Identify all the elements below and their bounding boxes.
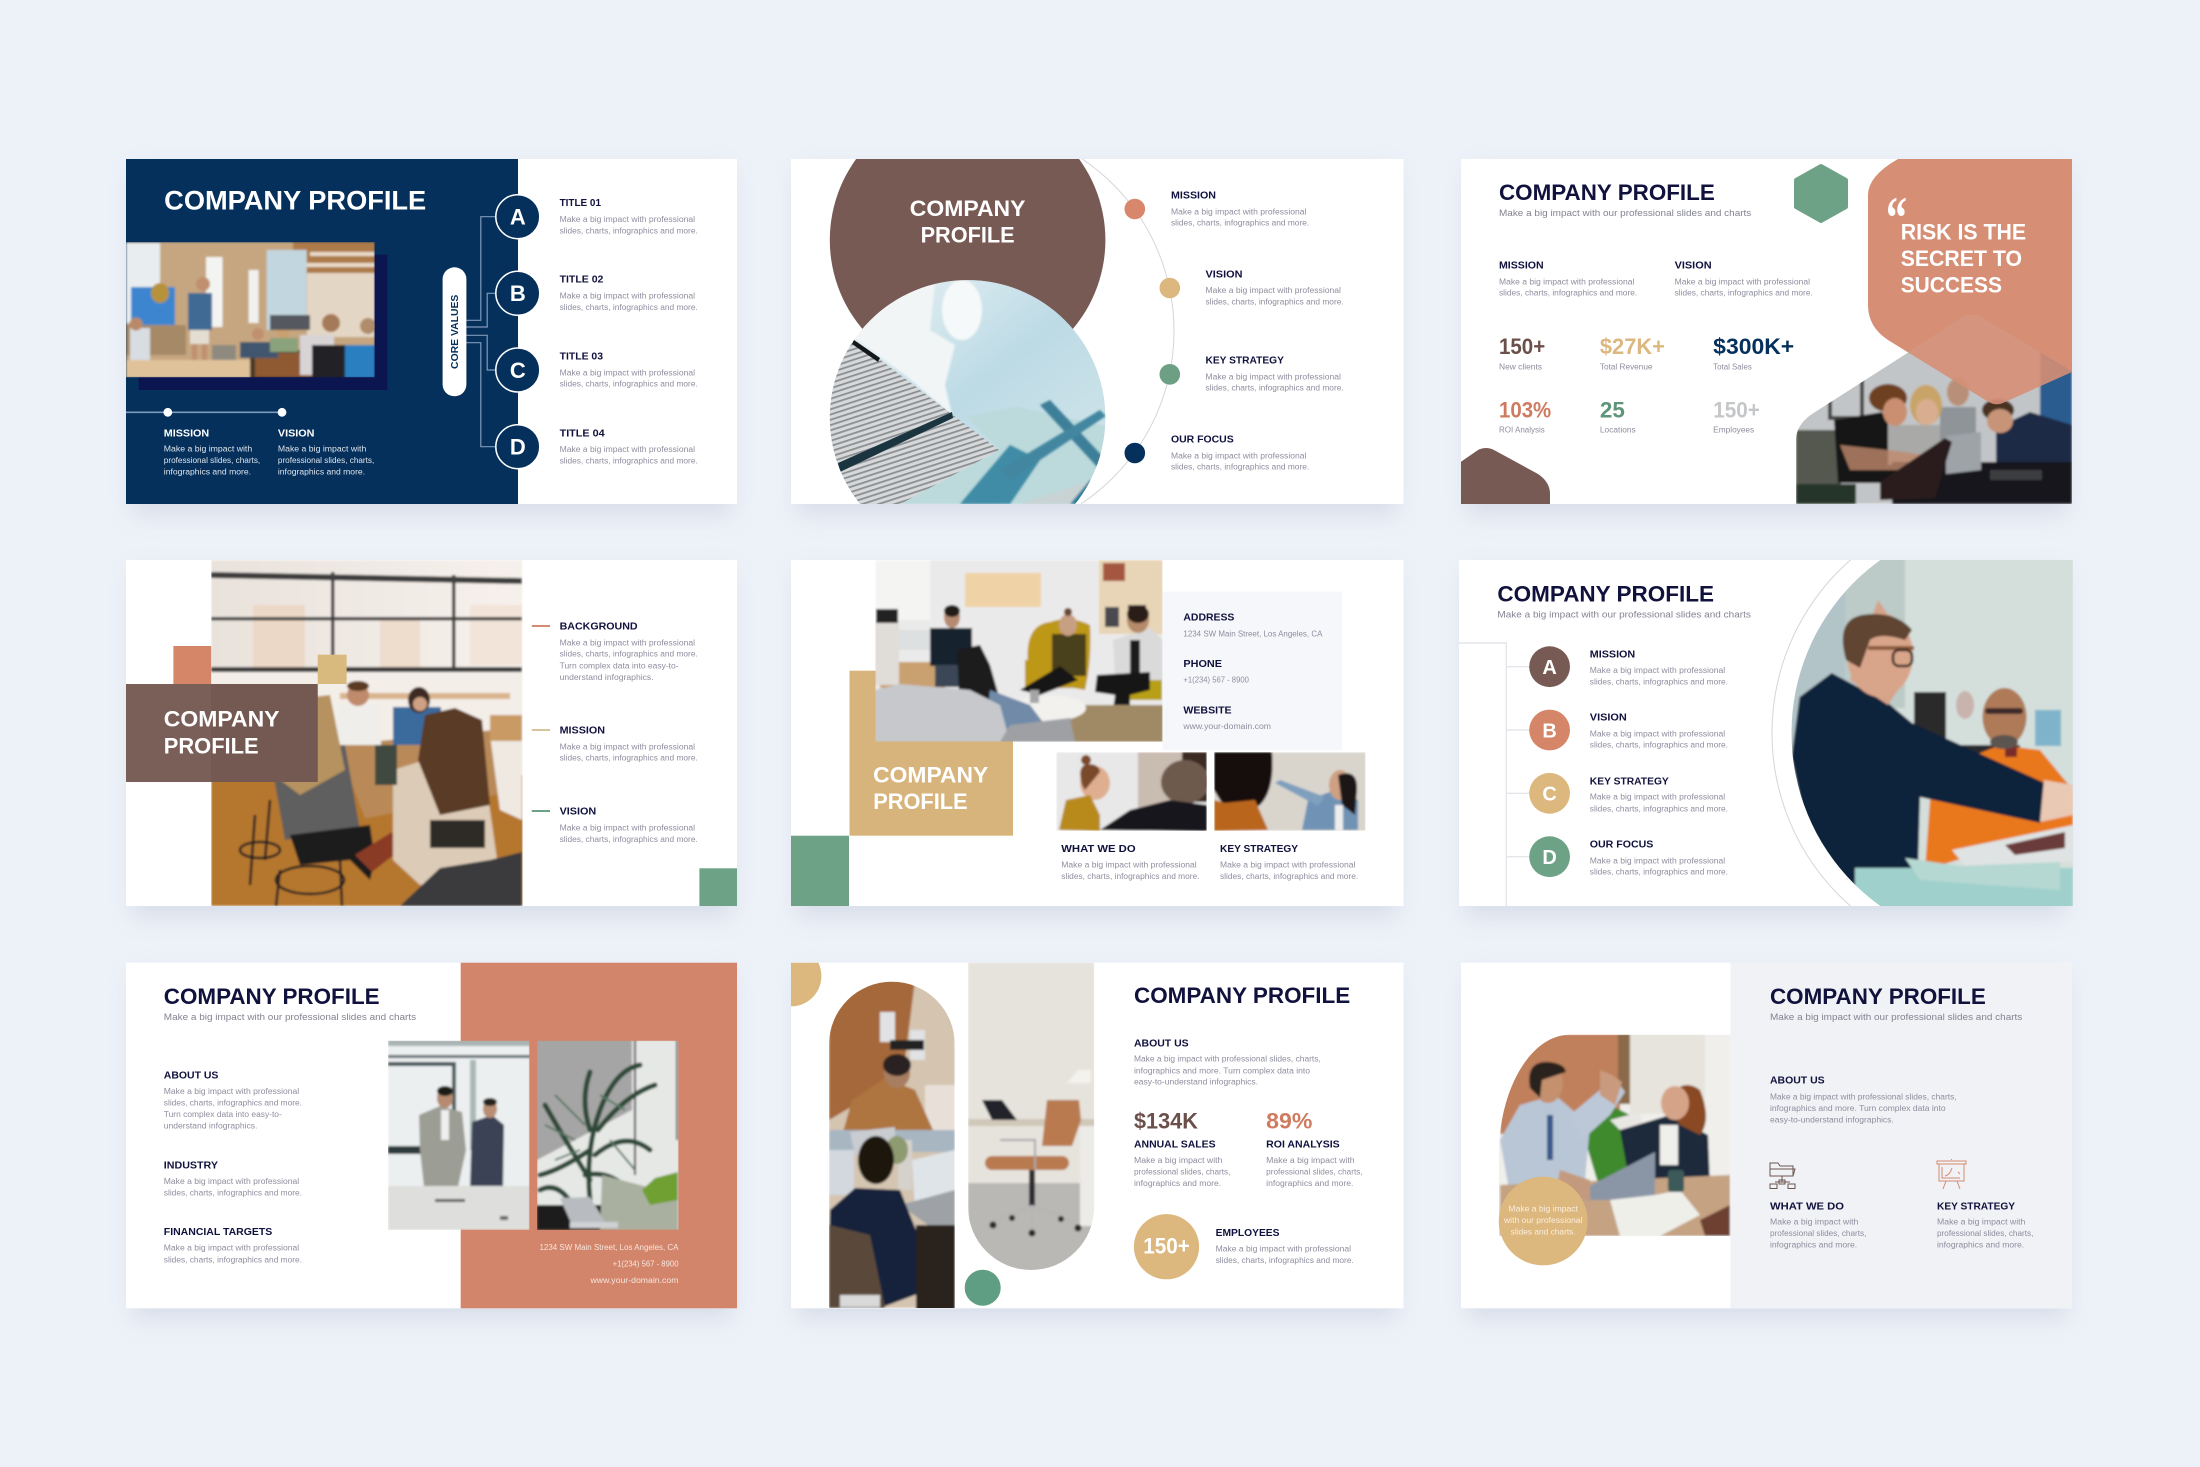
stat badge: 150+ — [1134, 1214, 1199, 1279]
text block: background — [532, 622, 698, 682]
text block: key strategy — [1206, 355, 1344, 393]
stat: locations: Locations — [1600, 426, 1636, 435]
text block: background: Make a big impact with professional — [560, 638, 695, 647]
text block: mission: Make a big impact with professional — [560, 742, 695, 751]
text block: key strategy: KEY STRATEGY — [1937, 1201, 2015, 1212]
text block: about us: understand infographics. — [164, 1121, 257, 1130]
panel: slide 3 key numbers — [1461, 159, 2072, 504]
quote text: “ — [1886, 185, 1907, 251]
text block: our focus: OUR FOCUS — [1590, 840, 1653, 851]
text block: about us — [164, 1070, 302, 1130]
text block: website: WEBSITE — [1183, 705, 1232, 716]
photo: presenter in office — [126, 242, 376, 378]
text block: our focus: Make a big impact with professional — [1590, 856, 1725, 865]
text block: what we do — [1061, 844, 1200, 881]
photo: woman at whiteboard — [1214, 752, 1366, 831]
text block: title 02: slides, charts, infographics and more. — [560, 303, 698, 312]
text block: key strategy: professional slides, charts, — [1937, 1229, 2033, 1238]
stat: employees: Employees — [1713, 426, 1754, 435]
stat badge: 150+: 150+ — [1143, 1234, 1190, 1259]
badge: D — [496, 425, 540, 469]
text block: key strategy — [1590, 776, 1728, 813]
text block: employees — [1216, 1228, 1354, 1265]
heading: company profile — [1499, 180, 1751, 219]
badge: D — [1529, 836, 1570, 877]
text block: what we do — [1770, 1201, 1866, 1250]
panel: slide 1 core values — [126, 159, 737, 504]
tan title block — [850, 671, 1013, 836]
text block: key strategy — [1220, 844, 1358, 881]
quote text: RISK IS THE — [1901, 219, 2026, 244]
text block: key strategy: KEY STRATEGY — [1206, 355, 1284, 366]
photo: two people on laptops — [829, 980, 955, 1310]
quote text: SUCCESS — [1901, 273, 2002, 298]
photo: team meeting in lounge — [875, 560, 1163, 742]
quote text: SECRET TO — [1901, 246, 2022, 271]
text block: about us: easy-to-understand infographics. — [1770, 1115, 1894, 1124]
stat: total revenue — [1600, 334, 1665, 372]
text block: about us: slides, charts, infographics and more. — [164, 1098, 302, 1107]
heading: company profile: Make a big impact with our professional slides and charts — [1497, 609, 1751, 620]
photo: team around a laptop — [1796, 315, 2072, 504]
text block: about us: infographics and more. Turn complex data into — [1770, 1104, 1946, 1113]
photo: two colleagues shaking hands — [1790, 558, 2074, 908]
text block: what we do: Make a big impact with professional — [1061, 861, 1197, 870]
text block: about us: ABOUT US — [164, 1070, 218, 1081]
contact background — [1162, 592, 1342, 750]
orange hexagon — [1868, 159, 2072, 404]
text block: about us — [1134, 1038, 1321, 1087]
text block: vision: slides, charts, infographics and more. — [1206, 297, 1344, 306]
text block: about us — [1770, 1076, 1957, 1124]
text block: mission: Make a big impact with professional — [1499, 277, 1635, 286]
stat: roi analysis: 103% — [1499, 397, 1551, 422]
text block: vision: VISION — [1675, 261, 1712, 272]
text block: key strategy — [1937, 1201, 2033, 1250]
text block: about us: ABOUT US — [1134, 1038, 1189, 1049]
panel: slide 4 background — [126, 560, 737, 906]
text block: vision — [278, 429, 374, 477]
text block: mission — [532, 726, 698, 763]
stat: employees — [1713, 397, 1760, 435]
brown title band — [126, 684, 318, 782]
text block: what we do: WHAT WE DO — [1770, 1201, 1844, 1212]
text block: our focus: slides, charts, infographics and more. — [1171, 463, 1309, 472]
text block: mission: MISSION — [560, 726, 605, 737]
text block: mission: MISSION — [164, 429, 209, 440]
heading: company profile: COMPANY PROFILE — [164, 984, 380, 1009]
text block: about us: ABOUT US — [1770, 1076, 1825, 1087]
text block: vision: Make a big impact with professional — [560, 823, 695, 832]
text block: phone — [1183, 659, 1250, 685]
text block: industry — [164, 1160, 302, 1197]
stat: roi analysis: Make a big impact with — [1266, 1156, 1355, 1165]
heading: company profile: COMPANY — [910, 196, 1025, 221]
text block: title 03: TITLE 03 — [560, 351, 603, 362]
text block: mission: slides, charts, infographics and more. — [1171, 219, 1309, 228]
green hexagon — [1796, 166, 1846, 221]
text block: title 01: TITLE 01 — [560, 198, 601, 209]
text block: address — [1183, 613, 1323, 638]
timeline with dots — [126, 408, 286, 417]
text block: mission — [164, 429, 260, 477]
quote text — [1886, 185, 2026, 298]
photo: glass building against the sky — [829, 279, 1107, 505]
stat: total revenue: Total Revenue — [1600, 363, 1652, 372]
photo: team at wooden table — [211, 560, 523, 906]
text block: title 03 — [560, 351, 698, 389]
text block: key strategy: Make a big impact with — [1937, 1218, 2025, 1227]
text block: title 02 — [560, 275, 698, 312]
text block: vision: Make a big impact with professional — [1675, 277, 1810, 286]
stat: new clients: 150+ — [1499, 334, 1545, 359]
stat: total sales: $300K+ — [1713, 334, 1794, 359]
text block: key strategy: KEY STRATEGY — [1590, 776, 1669, 787]
gray panel — [1730, 963, 2072, 1308]
text block: vision: Make a big impact with professional — [1590, 729, 1725, 738]
text block: contact details: 1234 SW Main Street, Los Angeles, CA — [540, 1243, 679, 1252]
text block: mission: Make a big impact with professional — [1171, 207, 1307, 216]
text block: vision: VISION — [560, 807, 596, 818]
text block: about us: easy-to-understand infographics. — [1134, 1078, 1258, 1087]
text block: phone: PHONE — [1183, 659, 1222, 670]
text block: mission: Make a big impact with — [164, 445, 252, 454]
text block: vision: VISION — [278, 429, 314, 440]
text block: mission — [1499, 261, 1637, 298]
heading: company profile: COMPANY PROFILE — [1499, 180, 1715, 205]
text block: employees: Make a big impact with professional — [1216, 1245, 1351, 1254]
tan title block: PROFILE — [873, 789, 968, 814]
text block: website: www.your-domain.com — [1182, 722, 1271, 731]
stat: roi analysis: ROI Analysis — [1499, 426, 1545, 435]
text block: contact details — [540, 1243, 679, 1285]
heading: company profile: COMPANY PROFILE — [1134, 983, 1350, 1008]
text block: our focus: OUR FOCUS — [1171, 434, 1234, 445]
text block: industry: Make a big impact with professional — [164, 1177, 299, 1186]
stat: locations — [1600, 397, 1636, 435]
photo: colleagues high five — [1495, 1034, 1731, 1237]
text block: title 01: slides, charts, infographics and more. — [560, 226, 698, 235]
tan title block: COMPANY — [873, 762, 988, 787]
green square — [791, 836, 849, 906]
tan circle callout: Make a big impact — [1508, 1205, 1579, 1214]
photo: leather office chair — [968, 962, 1095, 1273]
heading: company profile — [1770, 984, 2022, 1023]
stat: total sales — [1713, 334, 1794, 372]
badge: A: A — [1542, 657, 1557, 679]
text block: title 01 — [560, 198, 698, 235]
stat: annual sales: Make a big impact with — [1134, 1156, 1222, 1165]
text block: title 04: slides, charts, infographics and more. — [560, 456, 698, 465]
connector frame — [1459, 643, 1530, 906]
text block: our focus: slides, charts, infographics and more. — [1590, 868, 1728, 877]
text block: key strategy: infographics and more. — [1937, 1241, 2024, 1250]
text block: key strategy: slides, charts, infographics and more. — [1590, 804, 1728, 813]
pill: core values: CORE VALUES — [450, 295, 461, 369]
connector lines — [466, 217, 496, 447]
badge: C: C — [510, 358, 526, 383]
heading: company profile: Make a big impact with our professional slides and charts — [1499, 208, 1751, 219]
badge: D: D — [1542, 847, 1557, 869]
text block: title 02: TITLE 02 — [560, 275, 604, 286]
brown hexagon — [1461, 448, 1550, 504]
text block: background: Turn complex data into easy-to- — [560, 661, 679, 670]
text block: financial targets: FINANCIAL TARGETS — [164, 1227, 272, 1238]
text block: vision: infographics and more. — [278, 468, 365, 477]
text block: our focus: Make a big impact with professional — [1171, 451, 1307, 460]
green square — [699, 868, 737, 906]
panel: slide 5 contact — [791, 560, 1404, 906]
stat: total sales: Total Sales — [1713, 363, 1752, 372]
stat: roi analysis: ROI ANALYSIS — [1266, 1140, 1340, 1151]
text block: vision — [1206, 269, 1344, 306]
panel: slide 2 circles — [791, 159, 1404, 504]
text block: vision — [532, 807, 698, 844]
text block: mission: MISSION — [1499, 261, 1544, 272]
text block: mission — [1171, 191, 1309, 228]
badge: C: C — [1542, 784, 1557, 806]
text block: about us: Turn complex data into easy-to- — [164, 1110, 282, 1119]
text block: title 04: TITLE 04 — [560, 428, 605, 439]
text block: title 04 — [560, 428, 698, 465]
text block: vision: Make a big impact with — [278, 445, 366, 454]
badge: C — [496, 348, 540, 392]
text block: vision: VISION — [1590, 713, 1627, 724]
brown title band: COMPANY — [164, 707, 280, 732]
stat: roi analysis: 89% — [1266, 1109, 1312, 1134]
text block: employees: slides, charts, infographics and more. — [1216, 1256, 1354, 1265]
stat: new clients — [1499, 334, 1545, 372]
heading: company profile: COMPANY PROFILE — [1497, 581, 1714, 606]
heading: company profile: COMPANY PROFILE — [1770, 984, 1986, 1009]
badge: A — [496, 195, 540, 239]
panel: slide 8 arches — [761, 946, 1404, 1310]
photo: plant and laptop — [537, 1040, 679, 1230]
panel: slide 7 about us — [126, 963, 737, 1308]
badge: B: B — [510, 281, 526, 306]
tan circle callout — [1499, 1177, 1588, 1265]
text block: title 04: Make a big impact with professional — [560, 445, 695, 454]
text block: financial targets: slides, charts, infographics and more. — [164, 1255, 302, 1264]
panel: slide 9 high five — [1461, 963, 2072, 1308]
badge: C — [1529, 773, 1570, 814]
text block: about us: Make a big impact with professional slides, charts, — [1134, 1055, 1321, 1064]
text block: key strategy: Make a big impact with professional — [1590, 793, 1725, 802]
text block: vision: slides, charts, infographics and more. — [1590, 741, 1728, 750]
tan circle callout: slides and charts. — [1511, 1228, 1576, 1237]
text block: title 02: Make a big impact with professional — [560, 292, 695, 301]
stat: annual sales: ANNUAL SALES — [1134, 1140, 1216, 1151]
text block: our focus — [1171, 434, 1309, 472]
brown title band: PROFILE — [164, 733, 259, 758]
text block: employees: EMPLOYEES — [1216, 1228, 1280, 1239]
photo shadow block — [138, 255, 388, 390]
text block: key strategy: Make a big impact with professional — [1206, 372, 1341, 381]
badge: B — [496, 271, 540, 315]
text block: vision: Make a big impact with professional — [1206, 286, 1341, 295]
heading: company profile: PROFILE — [921, 223, 1015, 248]
stat: roi analysis — [1266, 1109, 1363, 1188]
text block: website — [1182, 705, 1271, 731]
text block: our focus — [1590, 840, 1728, 877]
brown circle — [830, 159, 1106, 329]
text block: key strategy: Make a big impact with professional — [1220, 861, 1356, 870]
text block: what we do: professional slides, charts, — [1770, 1229, 1866, 1238]
tan corner circle — [791, 962, 822, 1006]
icon: folder network — [1770, 1163, 1795, 1188]
heading: company profile: COMPANY PROFILE — [164, 185, 426, 215]
text block: mission: MISSION — [1590, 649, 1635, 660]
text block: vision — [1590, 713, 1728, 750]
text block: mission: infographics and more. — [164, 468, 251, 477]
text block: about us: Make a big impact with professional slides, charts, — [1770, 1093, 1957, 1102]
text block: key strategy: KEY STRATEGY — [1220, 844, 1298, 855]
text block: phone: +1(234) 567 - 8900 — [1183, 676, 1250, 685]
photo: woman speaking — [1056, 752, 1209, 831]
text block: background: understand infographics. — [560, 673, 654, 682]
heading: company profile: Make a big impact with our professional slides and charts — [1770, 1012, 2022, 1023]
heading: company profile — [164, 984, 416, 1023]
badge: D: D — [510, 435, 526, 460]
text block: mission: professional slides, charts, — [164, 456, 260, 465]
orange panel — [461, 963, 737, 1308]
text block: mission — [1590, 649, 1728, 686]
text block: address: 1234 SW Main Street, Los Angeles, CA — [1183, 629, 1323, 638]
text block: contact details: www.your-domain.com — [589, 1276, 678, 1285]
stat: roi analysis — [1499, 397, 1551, 435]
text block: address: ADDRESS — [1183, 613, 1234, 624]
text block: mission: slides, charts, infographics and more. — [1590, 677, 1728, 686]
heading: company profile — [910, 196, 1025, 248]
text block: what we do: slides, charts, infographics and more. — [1061, 872, 1200, 881]
text block: mission: slides, charts, infographics and more. — [1499, 289, 1637, 298]
text block: background: BACKGROUND — [560, 622, 638, 633]
panel: slide 6 badges with photo — [1459, 560, 2073, 906]
text block: key strategy: slides, charts, infographics and more. — [1220, 872, 1358, 881]
badge: A: A — [510, 205, 526, 230]
pill: core values — [443, 267, 466, 396]
icon: presentation board — [1937, 1160, 1966, 1189]
text block: financial targets: Make a big impact with professional — [164, 1244, 299, 1253]
photo: two businessmen at a window — [388, 1040, 530, 1230]
text block: about us: infographics and more. Turn complex data into — [1134, 1066, 1311, 1075]
text block: vision: VISION — [1206, 269, 1242, 280]
text block: vision: slides, charts, infographics and more. — [1675, 289, 1813, 298]
heading: company profile — [1497, 581, 1751, 620]
text block: what we do: WHAT WE DO — [1061, 844, 1136, 855]
tan circle callout: with our professional — [1503, 1216, 1583, 1225]
stat: roi analysis: infographics and more. — [1266, 1179, 1353, 1188]
badge: B — [1529, 710, 1570, 750]
stat: roi analysis: professional slides, charts, — [1266, 1167, 1363, 1176]
stat: annual sales: professional slides, charts, — [1134, 1167, 1230, 1176]
text block: mission: MISSION — [1171, 191, 1216, 202]
stat: annual sales: infographics and more. — [1134, 1179, 1221, 1188]
tan square — [318, 655, 347, 684]
text block: title 03: Make a big impact with professional — [560, 368, 695, 377]
thin arc — [1772, 560, 1851, 906]
navy panel — [126, 159, 518, 504]
text block: background: slides, charts, infographics and more. — [560, 650, 698, 659]
badge: B: B — [1542, 720, 1557, 742]
text block: industry: INDUSTRY — [164, 1160, 218, 1171]
stat: employees: 150+ — [1713, 397, 1760, 422]
text block: about us: Make a big impact with professional — [164, 1087, 299, 1096]
text block: contact details: +1(234) 567 - 8900 — [613, 1260, 679, 1269]
text block: key strategy: slides, charts, infographics and more. — [1206, 384, 1344, 393]
stat: annual sales: $134K — [1134, 1109, 1198, 1134]
text block: title 01: Make a big impact with professional — [560, 215, 695, 224]
text block: what we do: Make a big impact with — [1770, 1218, 1858, 1227]
badge: A — [1529, 646, 1570, 687]
stat: locations: 25 — [1600, 397, 1625, 422]
text block: financial targets — [164, 1227, 302, 1264]
text block: what we do: infographics and more. — [1770, 1241, 1857, 1250]
text block: mission: Make a big impact with professional — [1590, 666, 1725, 675]
arc with milestones — [1081, 159, 1180, 504]
orange square — [173, 646, 211, 684]
stat: new clients: New clients — [1499, 363, 1542, 372]
text block: mission: slides, charts, infographics and more. — [560, 754, 698, 763]
text block: industry: slides, charts, infographics and more. — [164, 1188, 302, 1197]
green circle — [965, 1270, 1001, 1306]
stat: total revenue: $27K+ — [1600, 334, 1665, 359]
text block: vision: slides, charts, infographics and more. — [560, 835, 698, 844]
text block: title 03: slides, charts, infographics and more. — [560, 380, 698, 389]
text block: vision — [1675, 261, 1813, 298]
stat: annual sales — [1134, 1109, 1230, 1188]
text block: vision: professional slides, charts, — [278, 456, 374, 465]
heading: company profile: Make a big impact with our professional slides and charts — [164, 1012, 416, 1023]
